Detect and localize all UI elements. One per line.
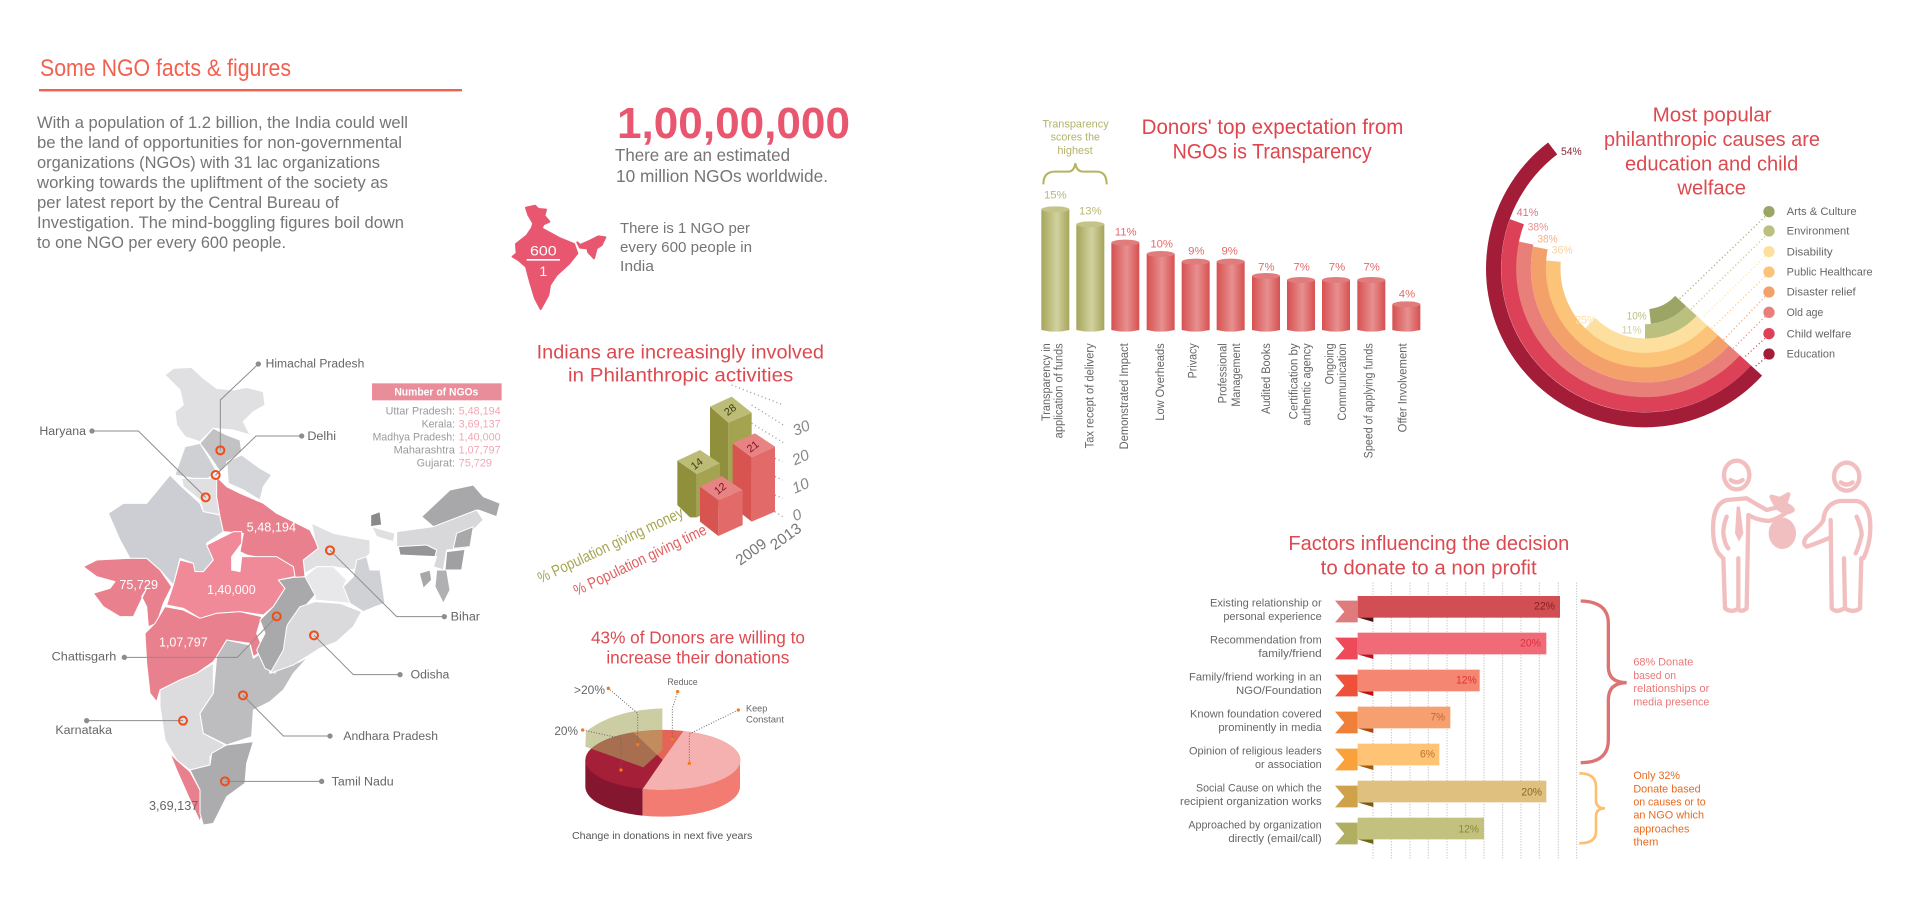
callout: 68 percent: 68% Donate [1633,657,1693,669]
heading: factors: to donate to a non profit [1321,557,1537,579]
NGO counts on map: 75,729 [119,578,158,592]
ribbon bar chart [1335,596,1560,844]
radial percentage labels: 36% [1552,245,1573,257]
heading: philanthropic activities [537,342,824,387]
map states [83,367,500,825]
3D bar chart: 14 [689,456,706,473]
legend: number of NGOs: Kerala: [422,419,455,431]
factor labels [1180,598,1323,845]
title: Some NGO facts & figures [40,55,291,82]
legend: number of NGOs: Maharashtra [394,445,455,457]
category labels: application of funds [1052,343,1066,438]
callout: 32 percent: approaches [1633,823,1690,835]
category labels: Ongoing [1322,343,1336,384]
legend: number of NGOs: Gujarat: [417,458,455,470]
callout: 68 percent [1633,657,1710,708]
heading: donor expectations: Donors' top expectation from [1142,115,1403,139]
heading: donor expectations [1142,115,1403,164]
3D pie chart: Keep [746,704,767,714]
factor labels: family/friend [1258,648,1322,660]
callout: 32 percent: Donate based [1633,783,1701,795]
legend: number of NGOs: Number of NGOs [394,386,478,398]
percentage labels: 7% [1329,262,1345,274]
leader lines [87,364,444,781]
3D bar chart: 0 [790,506,805,525]
gridlines [1373,583,1577,858]
heading: popular causes: welface [1676,177,1746,200]
category labels: Transparency in [1039,343,1053,421]
radial percentage labels [1517,146,1647,336]
NGO counts on map: 1,40,000 [207,583,256,597]
percentage labels: 9% [1188,246,1205,258]
text: 1 NGO per 600 people [620,220,752,275]
state labels [39,356,480,788]
3D bar chart [535,385,813,600]
legend: number of NGOs [372,383,502,470]
panel: philanthropic causes [1494,104,1873,420]
brace: 32 percent [1579,773,1605,843]
factor labels: personal experience [1223,611,1322,623]
heading: donors willing to increase [591,627,805,667]
state labels: Delhi [307,429,336,443]
intro paragraph: be the land of opportunities for non-governmental [37,134,402,152]
3D bar chart: 30 [790,417,813,440]
big number: 10 million NGOs [615,99,850,186]
bar percentages: 12% [1456,675,1477,687]
heading: popular causes: Most popular [1653,104,1772,127]
callout: transparency scores highest [1042,118,1109,184]
category labels [1039,343,1410,458]
factor labels: Social Cause on which the [1196,783,1322,795]
percentage labels: 9% [1221,246,1238,258]
radial percentage labels: 11% [1622,324,1642,336]
percentage labels: 11% [1115,227,1137,239]
intro paragraph: working towards the upliftment of the society as [36,174,388,192]
cylinder bar chart [1039,190,1420,458]
orange state markers [179,446,334,785]
category labels: Tax recept of delivery [1082,343,1096,448]
callout: 32 percent [1633,770,1706,849]
state labels: Bihar [451,610,480,624]
3D pie chart: >20% [574,683,605,697]
percentage labels: 7% [1258,262,1275,274]
big number: 10 million NGOs: 1,00,00,000 [617,99,850,148]
legend: number of NGOs: 1,07,797 [459,445,501,457]
text: 1 NGO per 600 people: every 600 people in [620,239,752,256]
category labels: Communication [1335,343,1349,421]
factor labels: prominently in media [1218,722,1323,734]
legend: number of NGOs: 5,48,194 [459,405,501,417]
heading: donor expectations: NGOs is Transparency [1173,140,1372,164]
callout: 68 percent: media presence [1633,696,1709,708]
factor labels: Recommendation from [1210,635,1322,647]
percentage labels: 15% [1044,190,1067,202]
bar percentages [1420,601,1555,835]
callout: transparency scores highest: highest [1057,145,1093,157]
intro paragraph: per latest report by the Central Bureau of [37,194,339,212]
legend: causes: Public Healthcare [1787,267,1873,279]
heading: popular causes: philanthropic causes are [1604,128,1820,151]
intro paragraph: to one NGO per every 600 people. [37,234,286,252]
3D bar chart: % Population giving money [535,504,686,587]
brace: 68 percent [1581,601,1627,763]
text: 1 NGO per 600 people: There is 1 NGO per [620,220,750,237]
intro paragraph: With a population of 1.2 billion, the India could well [37,114,408,132]
percentage labels: 4% [1399,288,1415,300]
state labels: Haryana [39,424,86,438]
3D bar chart: % Population giving time [571,522,710,600]
callout: 32 percent: an NGO which [1633,810,1704,822]
legend: causes: Disaster relief [1787,287,1857,299]
legend: causes: Old age [1787,307,1823,319]
3D bar chart: 28 [722,402,739,419]
intro paragraph: organizations (NGOs) with 31 lac organizations [37,154,380,172]
factor labels: Approached by organization [1188,820,1322,832]
3D pie chart: 20% [554,724,578,738]
state labels: Karnataka [55,723,112,737]
category labels: authentic agency [1300,343,1314,426]
callout: 32 percent: them [1633,837,1658,849]
factor labels: NGO/Foundation [1236,685,1322,697]
text: 1 NGO per 600 people: India [620,258,655,275]
factor labels: or association [1255,759,1322,771]
intro paragraph [36,114,408,252]
factor labels: directly (email/call) [1228,833,1322,845]
small India map: 1 NGO per 600 people [513,206,605,309]
panel: donor expectations [1039,115,1420,458]
category labels: Certification by [1286,343,1300,419]
factor labels: recipient organization works [1180,796,1322,808]
3D pie chart: Change in donations in next five years [572,831,752,842]
3D bar chart: 20 [789,446,813,470]
category labels: Demonstrated Impact [1117,343,1131,449]
NGO counts on map: 5,48,194 [247,521,296,535]
bar percentages: 20% [1521,787,1542,799]
small India map: 1 NGO per 600 people: 1 [539,263,547,279]
heading: philanthropic activities: in Philanthropic activities [568,366,793,387]
3D pie chart: Reduce [667,677,698,687]
panel: factors influencing donation [1180,533,1710,858]
3D bar chart: 10 [790,475,813,497]
category labels: Professional [1216,343,1230,403]
heading: factors [1288,533,1569,579]
intro paragraph: Investigation. The mind-boggling figures boil down [37,214,404,232]
percentage labels: 13% [1079,206,1102,218]
3D bar chart: 21 [745,439,762,455]
factor labels: Family/friend working in an [1189,672,1322,684]
radial percentage labels: 41% [1517,207,1539,219]
radial percentage labels: 38% [1528,222,1549,234]
legend: number of NGOs: Madhya Pradesh: [373,432,455,444]
bar percentages: 20% [1520,638,1541,650]
percentage labels: 10% [1150,238,1173,250]
legend: number of NGOs: Uttar Pradesh: [386,405,455,417]
heading: popular causes: education and child [1625,152,1798,175]
heading: donors willing to increase: increase their donations [606,647,789,667]
state labels: Odisha [411,668,449,682]
legend: causes: Arts & Culture [1787,206,1857,218]
3D bar chart: 12 [712,481,729,497]
state labels: Chattisgarh [52,650,116,664]
heading: donors willing to increase: 43% of Donors are willing to [591,627,805,647]
category labels: Speed of applying funds [1362,343,1376,458]
factor labels: Opinion of religious leaders [1189,746,1322,758]
3D pie chart: Constant [746,715,784,725]
legend: causes: Disability [1787,247,1833,259]
panel: philanthropic involvement and donations [535,342,824,842]
NGO counts on map: 3,69,137 [149,799,198,813]
radial percentage labels: 54% [1561,146,1582,158]
bar percentages: 12% [1458,823,1479,835]
factor labels: Known foundation covered [1190,709,1322,721]
callout: 32 percent: Only 32% [1633,770,1680,782]
percentage labels: 7% [1363,262,1380,274]
category labels: Privacy [1186,343,1200,378]
icon: donor handing money bag to recipient [1713,461,1870,611]
callout: transparency scores highest: Transparency [1042,118,1109,130]
legend: causes [1677,206,1873,367]
bar percentages: 22% [1534,601,1555,613]
heading: factors: Factors influencing the decision [1288,533,1569,555]
radial percentage labels: 38% [1537,234,1558,246]
callout: 68 percent: relationships or [1633,683,1710,695]
radial percentage labels: 25% [1575,314,1597,326]
percentage labels [1044,190,1415,300]
radial percentage labels: 10% [1627,310,1647,322]
3D bar chart: 2013 [767,520,805,554]
legend: number of NGOs: 75,729 [459,458,492,470]
category labels: Low Overheads [1153,343,1167,421]
state labels: Himachal Pradesh [266,356,364,370]
heading: popular causes [1604,104,1820,200]
NGO counts on map: 1,07,797 [159,636,208,650]
category labels: Audited Books [1259,343,1273,414]
radial bar chart [1494,148,1757,420]
callout: 68 percent: based on [1633,670,1676,682]
big number: 10 million NGOs: There are an estimated [615,145,790,165]
percentage labels: 7% [1293,262,1310,274]
bar percentages: 7% [1431,712,1445,724]
legend: causes: Child welfare [1787,328,1851,340]
heading: philanthropic activities: Indians are increasingly involved [537,342,824,363]
state labels: Andhara Pradesh [343,729,438,743]
big number: 10 million NGOs: 10 million NGOs worldwide. [616,166,828,186]
bar percentages: 6% [1420,749,1435,761]
legend: number of NGOs: 3,69,137 [459,419,501,431]
3D pie chart [554,677,784,842]
legend: causes: Education [1787,349,1835,361]
category labels: Offer Involvement [1396,343,1410,432]
3D bar chart: 2009 [733,535,770,569]
legend: number of NGOs: 1,40,000 [459,432,501,444]
leader end dots [84,361,447,784]
state labels: Tamil Nadu [332,774,394,788]
legend: causes: Environment [1787,226,1849,238]
factor labels: Existing relationship or [1210,598,1322,610]
callout: 32 percent: on causes or to [1633,797,1706,809]
small India map: 1 NGO per 600 people: 600 [530,242,557,258]
callout: transparency scores highest: scores the [1051,132,1100,144]
category labels: Management [1229,343,1243,407]
NGO counts on map [119,521,296,813]
main India map with NGO counts [39,356,502,825]
